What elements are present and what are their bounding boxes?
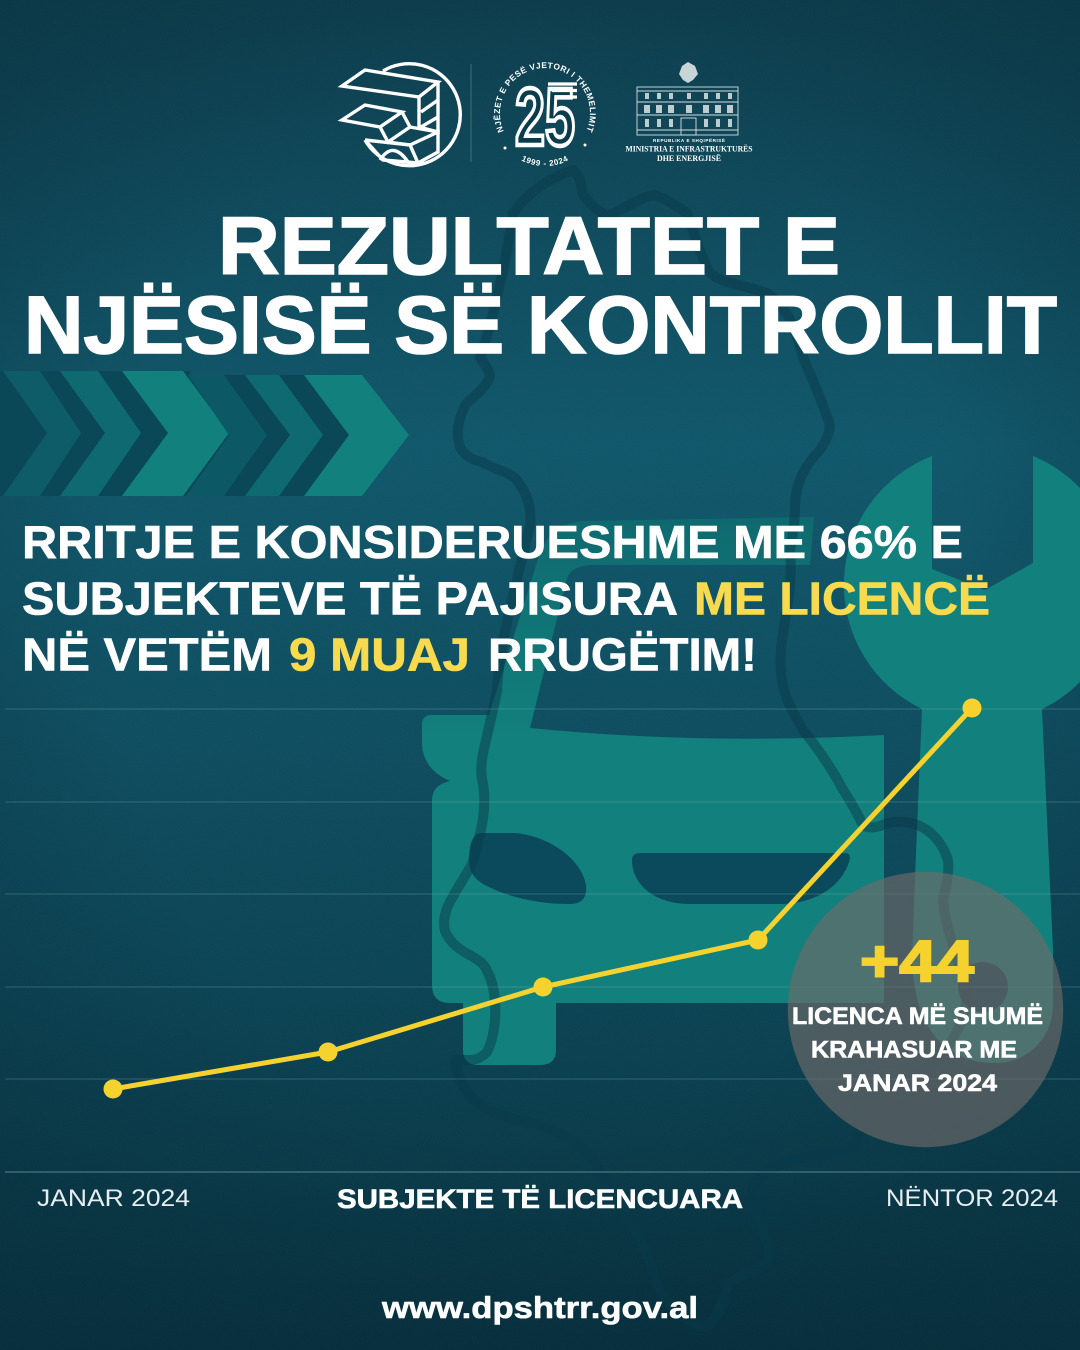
chart grid lines	[5, 709, 1080, 1079]
divider between logos	[470, 64, 472, 162]
logo: 25th anniversary badge: NJËZET E PESË VJETORI I THEMELIMIT	[492, 62, 596, 133]
title: REZULTATET E	[218, 201, 840, 292]
logo: 25th anniversary badge: 25	[515, 72, 575, 163]
logo: Ministry of Infrastructure and Energy: DHE ENERGJISË	[657, 154, 721, 163]
main statement text: 9 MUAJ	[289, 628, 470, 680]
main statement text: SUBJEKTEVE TË PAJISURA	[22, 572, 678, 624]
callout: +44 licences: KRAHASUAR ME	[811, 1036, 1017, 1064]
website: www.dpshtrr.gov.al	[381, 1290, 698, 1325]
title	[24, 201, 1057, 371]
axis label: chart title: SUBJEKTE TË LICENCUARA	[337, 1184, 743, 1214]
axis label: start: JANAR 2024	[37, 1185, 190, 1212]
map outline of Albania	[444, 170, 967, 1327]
axis label: end: NËNTOR 2024	[886, 1185, 1058, 1212]
logo: 25th anniversary badge	[492, 62, 596, 166]
logo: Ministry of Infrastructure and Energy: MINISTRIA E INFRASTRUKTURËS	[626, 144, 753, 154]
logo: DPSHTRR emblem	[342, 64, 460, 166]
icon: wrench	[844, 456, 1080, 1063]
main statement text: NË VETËM	[22, 628, 272, 680]
main statement text: RRUGËTIM!	[488, 628, 757, 680]
main statement text	[22, 516, 990, 680]
callout: +44 licences: JANAR 2024	[838, 1070, 997, 1097]
callout circle background	[788, 872, 1063, 1147]
callout: +44 licences: +44	[860, 929, 974, 994]
line chart: licensed subjects	[104, 698, 982, 1098]
chevron arrows	[0, 371, 409, 496]
main statement text: ME LICENCË	[694, 572, 990, 624]
logo: Ministry of Infrastructure and Energy	[626, 62, 753, 163]
logo: 25th anniversary badge: 1999 - 2024	[522, 156, 568, 166]
icon: car	[422, 517, 884, 1065]
main statement text: RRITJE E KONSIDERUESHME ME 66% E	[22, 516, 963, 568]
callout: +44 licences: LICENCA MË SHUMË	[792, 1003, 1043, 1030]
logo: Ministry of Infrastructure and Energy: REPUBLIKA E SHQIPËRISË	[653, 137, 725, 143]
chart axis line	[5, 1171, 1080, 1173]
title: NJËSISË SË KONTROLLIT	[24, 280, 1057, 371]
callout: +44 licences	[792, 929, 1043, 1097]
